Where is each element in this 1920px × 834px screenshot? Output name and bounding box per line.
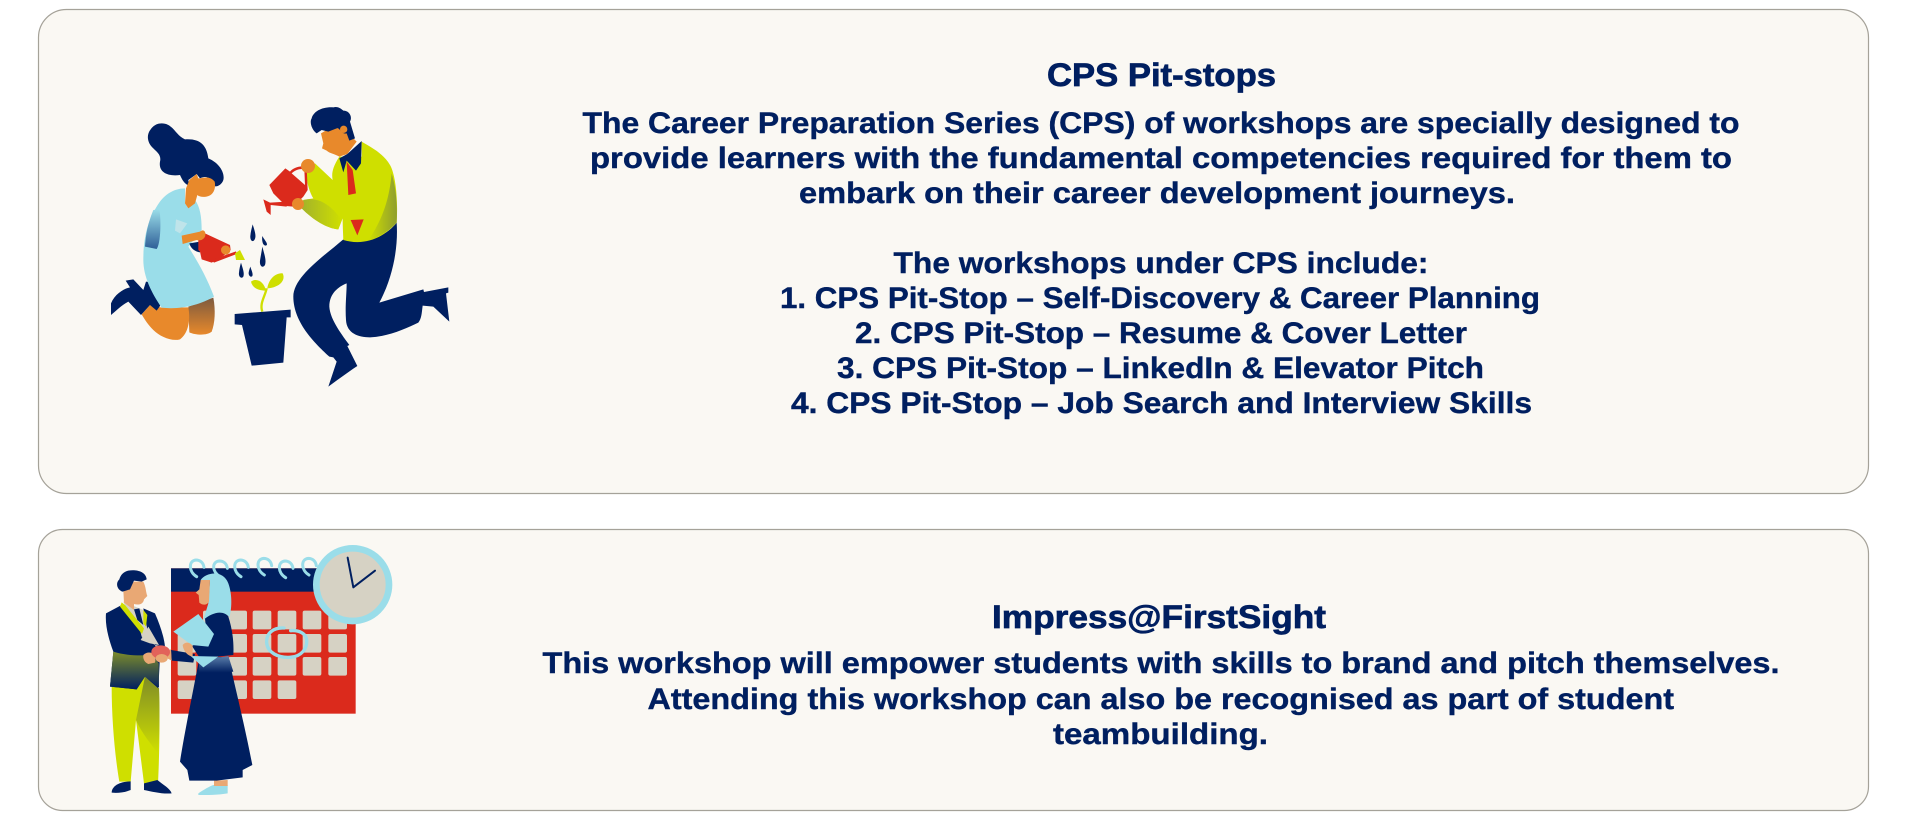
text block: workshop description bbox=[542, 647, 1780, 751]
text block: workshop list: 4. CPS Pit-Stop – Job Search and Interview Skills bbox=[791, 387, 1532, 420]
clock bbox=[316, 548, 389, 621]
potted seedling bbox=[235, 273, 291, 366]
text block: workshop list: 1. CPS Pit-Stop – Self-Discovery & Career Planning bbox=[780, 282, 1540, 315]
text block: workshop description: teambuilding. bbox=[1053, 718, 1268, 751]
card background bbox=[38, 530, 1868, 810]
panel: CPS Pit-stops bbox=[38, 10, 1868, 494]
woman bbox=[151, 574, 252, 795]
illustration: two people watering a seedling bbox=[111, 107, 449, 387]
man bbox=[106, 570, 172, 794]
text block: workshop list: The workshops under CPS include: bbox=[894, 247, 1428, 280]
woman bbox=[111, 123, 245, 340]
panel: Impress@FirstSight bbox=[38, 530, 1868, 810]
text block: workshop list bbox=[780, 247, 1540, 420]
water drops bbox=[239, 224, 267, 278]
card background bbox=[38, 10, 1868, 494]
heading: Impress@FirstSight: Impress@FirstSight bbox=[992, 599, 1326, 635]
heading: CPS Pit-stops: CPS Pit-stops bbox=[1047, 57, 1276, 93]
text block: workshop list: 2. CPS Pit-Stop – Resume & Cover Letter bbox=[855, 317, 1468, 350]
text block: workshop description: This workshop will empower students with skills to brand and pitch themselves. bbox=[542, 647, 1780, 680]
text block: CPS description: provide learners with the fundamental competencies required for them to bbox=[590, 142, 1732, 175]
text block: CPS description: embark on their career development journeys. bbox=[799, 177, 1515, 210]
illustration: handshake in front of calendar and clock bbox=[106, 548, 389, 795]
man bbox=[263, 107, 449, 387]
text block: CPS description: The Career Preparation Series (CPS) of workshops are specially designed to bbox=[582, 107, 1740, 140]
text block: workshop list: 3. CPS Pit-Stop – LinkedIn & Elevator Pitch bbox=[837, 352, 1484, 385]
text block: CPS description bbox=[582, 107, 1740, 210]
calendar bbox=[171, 558, 356, 714]
text block: workshop description: Attending this workshop can also be recognised as part of student bbox=[648, 683, 1674, 716]
